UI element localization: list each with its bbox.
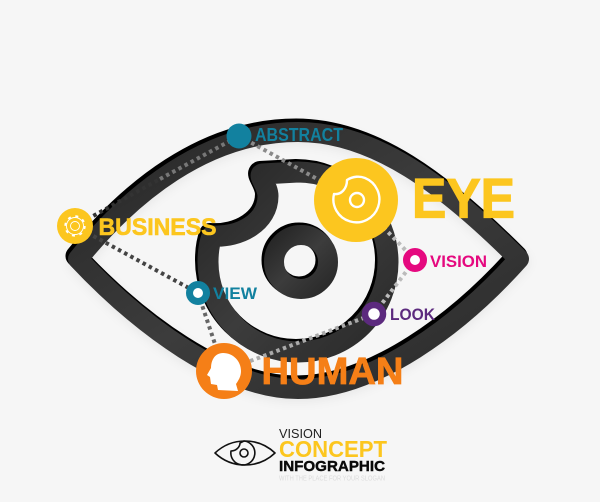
- label: LOOK: LOOK: [390, 305, 436, 324]
- logo: CONCEPT heading: CONCEPT: [279, 436, 387, 462]
- node: vision: [406, 252, 424, 268]
- dotted connector lines: [75, 136, 415, 371]
- label: ABSTRACT: ABSTRACT: [255, 125, 343, 145]
- icon: gear: [65, 216, 85, 236]
- label: BUSINESS: BUSINESS: [98, 214, 216, 241]
- logo: INFOGRAPHIC heading: INFOGRAPHIC: [279, 458, 385, 475]
- label: HUMAN: HUMAN: [262, 351, 404, 393]
- node: eye: [314, 158, 398, 242]
- node: look: [365, 305, 383, 323]
- node: business: [57, 208, 93, 244]
- illustration: pupil ring: [272, 233, 328, 289]
- logo: small eye icon: [215, 441, 275, 465]
- illustration: iris ring with notch: [206, 170, 388, 352]
- logo: VISION heading: VISION: [279, 427, 322, 441]
- label: VISION: VISION: [430, 252, 487, 271]
- illustration: eye outline: [76, 129, 519, 392]
- icon: eye iris: [333, 177, 379, 222]
- label: VIEW: VIEW: [213, 284, 258, 303]
- label: EYE: EYE: [412, 166, 515, 230]
- node: view: [190, 284, 206, 302]
- icon: human head: [207, 353, 241, 391]
- node: human: [196, 343, 252, 399]
- logo: slogan: WITH THE PLACE FOR YOUR SLOGAN: [279, 474, 385, 482]
- node: abstract: [226, 124, 252, 148]
